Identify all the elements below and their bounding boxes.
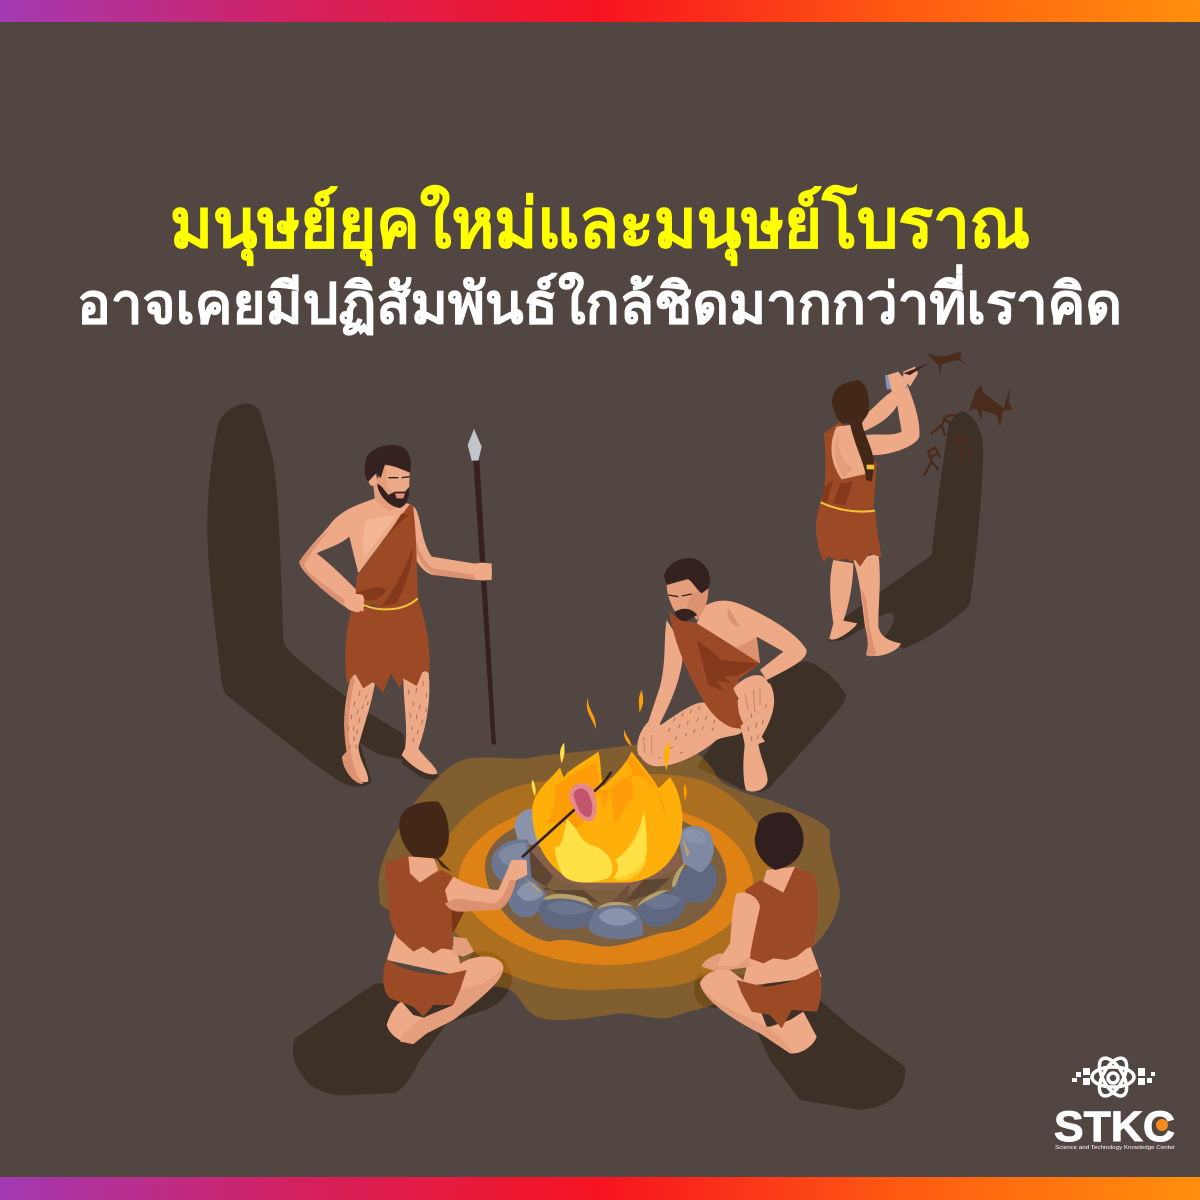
cave paintings bbox=[924, 351, 1013, 475]
woman hair and braid bbox=[832, 381, 874, 482]
hide bbox=[669, 612, 760, 728]
hand on hip bbox=[344, 594, 364, 612]
upper body bbox=[717, 867, 818, 967]
legs bbox=[342, 670, 437, 784]
top gradient bar bbox=[0, 0, 1200, 22]
figure: seated woman left bbox=[383, 801, 527, 1044]
raised leg and foot bbox=[735, 683, 774, 792]
skirt bbox=[345, 600, 430, 693]
figure: crouching man body bbox=[637, 558, 807, 792]
logo wordmark: STKC bbox=[1054, 1103, 1175, 1151]
hide over shoulder bbox=[356, 504, 418, 607]
roasting stick bbox=[523, 773, 611, 857]
figure: seated woman right bbox=[700, 812, 822, 1054]
torso and arms bbox=[299, 498, 492, 612]
stones bbox=[492, 809, 717, 939]
woman legs bbox=[829, 553, 901, 656]
inner glow bbox=[458, 809, 753, 965]
logs bbox=[530, 843, 687, 903]
woman back and arms bbox=[831, 363, 928, 479]
upper body bbox=[385, 853, 527, 953]
outer glow bbox=[378, 745, 840, 1020]
lower body bbox=[383, 933, 503, 1044]
logo bbox=[1054, 1054, 1175, 1151]
woman shadow bbox=[828, 412, 983, 648]
man shadow bbox=[207, 403, 407, 787]
left arm bbox=[637, 620, 683, 762]
title bbox=[77, 184, 1122, 335]
bottom gradient bar bbox=[0, 1177, 1200, 1200]
hand on knee bbox=[643, 675, 770, 755]
crouching man shadow bbox=[697, 662, 846, 792]
meat bbox=[569, 783, 596, 821]
stone ring shadow bbox=[485, 813, 727, 947]
logo pixels bbox=[1072, 1068, 1155, 1085]
lower thigh bbox=[638, 702, 742, 766]
head bbox=[664, 558, 710, 622]
hair bbox=[399, 801, 449, 859]
logo tagline: Science and Technology Knowledge Center bbox=[1055, 1145, 1175, 1151]
chest and right arm bbox=[697, 601, 807, 680]
logo orange dot bbox=[1156, 1119, 1168, 1131]
figure: standing man with spear bbox=[207, 403, 496, 787]
seated figures shadows and fire glow pools bbox=[293, 745, 905, 1110]
campfire bbox=[492, 690, 717, 939]
flames bbox=[532, 752, 682, 883]
woman dress bbox=[816, 422, 882, 567]
head bbox=[365, 445, 411, 512]
title line 1: มนุษย์ยุคใหม่และมนุษย์โบราณ bbox=[170, 184, 1030, 266]
flying sparks bbox=[532, 690, 687, 801]
seated shadow left bbox=[293, 951, 512, 1095]
spear bbox=[468, 429, 496, 744]
logo atom icon bbox=[1092, 1054, 1134, 1100]
lower body bbox=[700, 945, 822, 1054]
figure: cave painter woman bbox=[697, 351, 1013, 792]
title line 2: อาจเคยมีปฏิสัมพันธ์ใกล้ชิดมากกว่าที่เราคิด bbox=[77, 264, 1122, 335]
hair bbox=[755, 812, 804, 870]
middle glow bbox=[433, 774, 780, 990]
seated shadow right bbox=[694, 973, 905, 1110]
hand on spear bbox=[473, 563, 492, 580]
belt bbox=[363, 598, 418, 609]
